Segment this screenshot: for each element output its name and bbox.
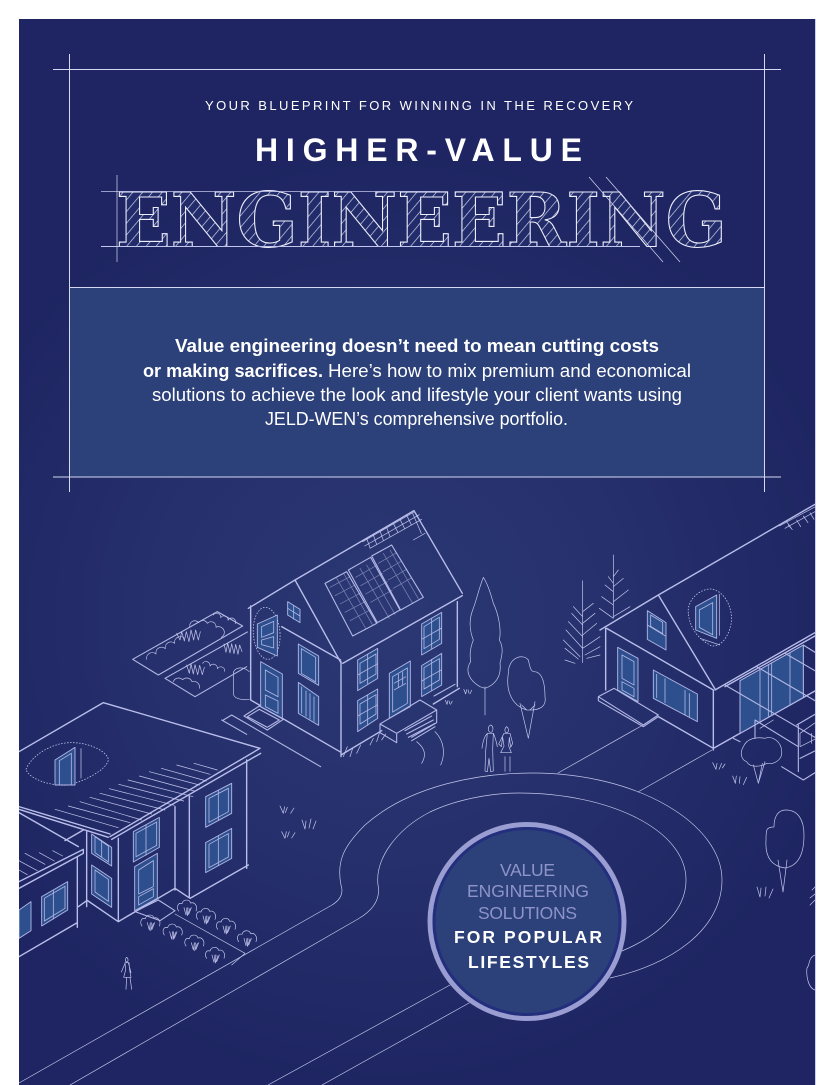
people [482,725,513,772]
lawn tufts and trees [302,810,815,990]
garden beds [133,612,247,697]
left roof [19,849,83,888]
walking person [121,957,132,989]
doorstep and path [135,900,175,921]
solar panels [325,545,423,636]
grass [280,806,295,838]
badge text: LIFESTYLES [468,952,589,972]
intro text: JELD-WEN’s comprehensive portfolio. [265,408,568,429]
badge text: SOLUTIONS [478,903,577,923]
roof [248,511,462,757]
porch glazing [740,645,803,733]
badge text: FOR POPULAR [454,927,602,947]
roof tiles [363,512,425,548]
picture window [653,670,697,722]
grass [464,689,472,694]
rain barrel [233,668,249,700]
pine trees [563,555,630,663]
stoop and steps [222,684,455,767]
neighbourhood illustration [19,503,817,1085]
roof [19,703,261,847]
bush [741,737,782,783]
left face door and windows [261,662,282,718]
title frame [53,54,781,492]
shrubs [141,915,160,931]
walls [19,760,248,957]
grass [713,763,747,785]
dotted oval with door [26,743,108,785]
house 3 flat roof [19,703,295,989]
badge text: ENGINEERING [467,881,589,901]
gable window [647,611,666,650]
trees [468,577,502,715]
callout badge [430,824,624,1018]
front door [618,647,638,702]
badge text [454,860,602,972]
intro text: or making sacrifices. [143,360,323,381]
gable windows and dotted oval [288,602,300,623]
rafters [55,763,217,828]
intro text: Value engineering doesn’t need to mean cutting costs [175,335,659,356]
house 2 with porch [563,503,817,785]
dotted oval with door [688,589,732,646]
heading: engineering blueprint lettering: ENGINEERING [116,176,727,264]
right face door and windows [358,648,378,691]
roof tiles [779,506,817,530]
intro text [143,335,691,429]
badge text: VALUE [500,860,555,880]
intro box [70,288,764,477]
heading: higher-value: HIGHER-VALUE [255,132,582,168]
step [598,688,658,727]
roof and walls [600,503,817,750]
eyebrow heading: YOUR BLUEPRINT FOR WINNING IN THE RECOVERY [205,98,633,113]
windows [206,783,232,827]
road [19,725,722,1085]
intro text: solutions to achieve the look and lifestyle your client wants using [152,384,682,405]
house 1 with solar roof [133,511,545,772]
porch beams [725,645,817,780]
intro text: Here’s how to mix premium and economical [328,360,691,381]
